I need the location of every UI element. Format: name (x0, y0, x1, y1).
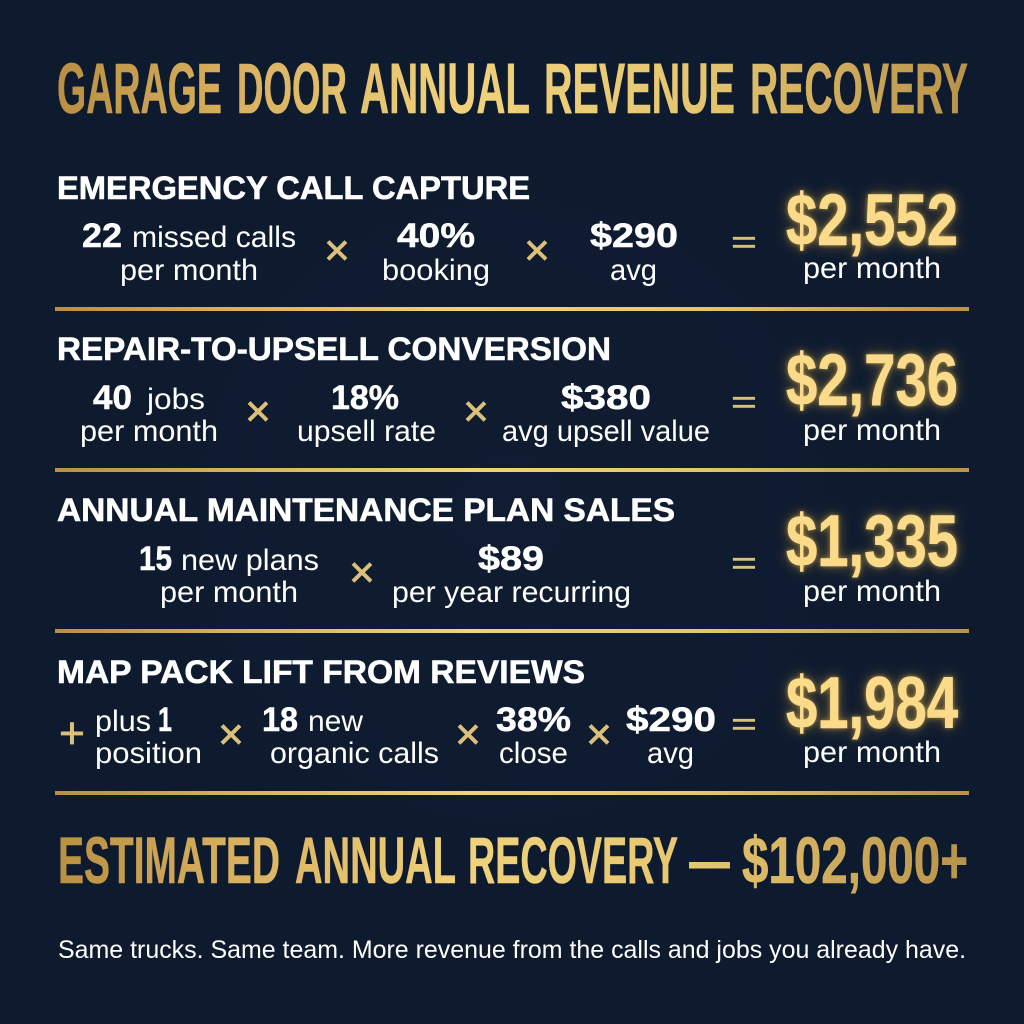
factor: average value: $290 (626, 701, 716, 739)
result: $1,984: $1,984 (786, 663, 958, 744)
factor: jobs: per month (80, 415, 218, 448)
factor: upsell rate (297, 379, 436, 448)
factor: jobs (80, 379, 218, 448)
operator: equals: = (731, 385, 757, 420)
operator: times: × (524, 226, 550, 275)
factor: position: position (95, 737, 202, 770)
factor: booking: booking (382, 254, 490, 287)
factor: average value: avg (647, 737, 694, 770)
operator: equals: = (731, 546, 757, 581)
factor: average value: $290 (590, 217, 678, 255)
factor: average value (626, 701, 716, 770)
operator: times: × (455, 710, 481, 759)
factor: position (95, 701, 202, 770)
factor: position: plus (95, 705, 151, 738)
total: estimated annual recovery (58, 823, 968, 897)
factor: missed calls: missed calls (132, 221, 296, 254)
factor: upsell value (502, 379, 710, 448)
factor: booking: 40% (397, 217, 475, 255)
factor: close rate: 38% (496, 701, 571, 739)
factor: upsell rate: upsell rate (297, 415, 436, 448)
factor: organic calls (262, 701, 439, 770)
factor: missed calls (82, 217, 296, 287)
title (57, 50, 968, 129)
operator: times: × (349, 548, 375, 597)
result caption: per month (803, 252, 941, 285)
factor: upsell rate: 18% (331, 379, 399, 417)
heading: annual maintenance plan sales: ANNUAL MAINTENANCE PLAN SALES (57, 492, 675, 528)
total: estimated annual recovery: RECOVERY (468, 823, 678, 897)
panel: annual maintenance plan sales (57, 492, 958, 609)
factor: position: 1 (158, 701, 172, 739)
factor: organic calls: 18 (262, 701, 298, 739)
factor: missed calls: 22 (82, 217, 122, 255)
title: DOOR (237, 50, 347, 129)
result: $2,736: $2,736 (786, 340, 958, 421)
factor: upsell value: $380 (561, 379, 651, 417)
title: ANNUAL (360, 50, 530, 129)
panel: map pack lift from reviews (57, 654, 958, 770)
result: $2,552: $2,552 (786, 180, 958, 261)
factor: new plans: per month (160, 576, 298, 609)
factor: close rate: close (499, 737, 568, 770)
factor: booking (382, 217, 490, 287)
factor: jobs: 40 (93, 379, 132, 417)
factor: recurring price: $89 (478, 540, 544, 578)
factor: new plans: 15 (139, 540, 172, 578)
factor: close rate (496, 701, 571, 770)
title: GARAGE (57, 50, 222, 129)
result caption: per month (803, 414, 941, 447)
total: estimated annual recovery: ESTIMATED (58, 823, 280, 897)
total: estimated annual recovery: ANNUAL (295, 823, 456, 897)
title: REVENUE (544, 50, 735, 129)
factor: organic calls: new (308, 705, 363, 738)
operator: times: × (586, 710, 612, 759)
result caption: per month (803, 736, 941, 769)
result: $1,335: $1,335 (786, 501, 958, 582)
result caption: per month (803, 575, 941, 608)
factor: recurring price (392, 540, 631, 609)
factor: average value: avg (610, 254, 657, 287)
factor: organic calls: organic calls (270, 737, 439, 770)
panel: repair-to-upsell conversion (57, 331, 958, 448)
operator: times: × (245, 387, 271, 436)
total: estimated annual recovery: — (689, 823, 730, 897)
factor: average value (590, 217, 678, 287)
heading: map pack lift from reviews: MAP PACK LIFT FROM REVIEWS (57, 654, 585, 690)
panel: emergency call capture (57, 170, 958, 287)
factor: missed calls: per month (120, 254, 258, 287)
factor: jobs: jobs (146, 383, 205, 416)
heading: repair-to-upsell conversion: REPAIR-TO-UPSELL CONVERSION (57, 331, 611, 367)
factor: new plans (139, 540, 319, 609)
factor: recurring price: per year recurring (392, 576, 631, 609)
footer tagline: Same trucks. Same team. More revenue from the calls and jobs you already have. (58, 936, 966, 964)
operator: times: × (218, 710, 244, 759)
factor: new plans: new plans (181, 544, 319, 577)
heading: emergency call capture: EMERGENCY CALL CAPTURE (57, 170, 530, 206)
operator: plus: + (59, 709, 85, 758)
operator: times: × (324, 226, 350, 275)
factor: upsell value: avg upsell value (502, 415, 710, 448)
operator: equals: = (731, 707, 757, 742)
operator: times: × (463, 387, 489, 436)
operator: equals: = (731, 225, 757, 260)
